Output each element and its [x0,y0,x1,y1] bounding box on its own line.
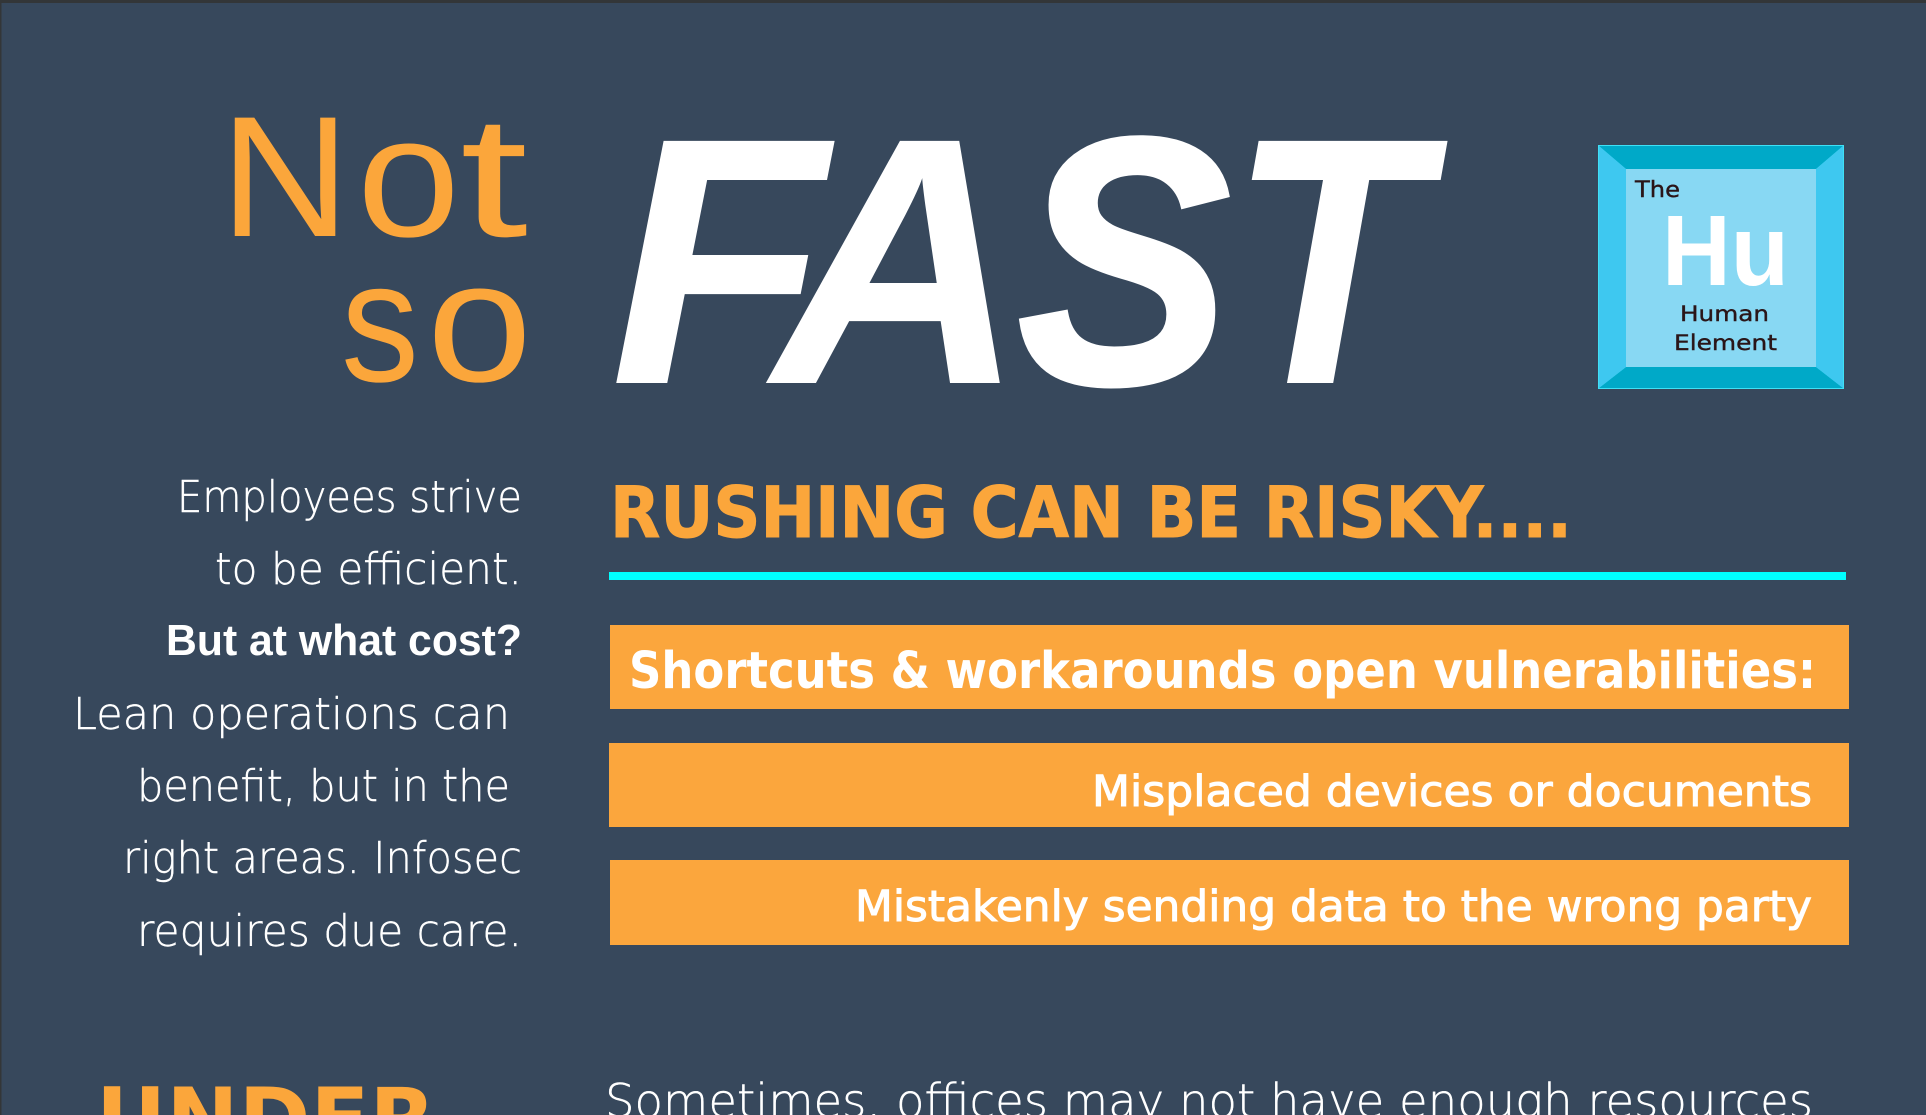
text block: intro paragraph: But at what cost? [166,616,522,665]
icon: Hu Human Element periodic tile [1598,145,1844,389]
callout: misplaced devices bar: Misplaced devices or documents [1092,767,1812,817]
text block: intro paragraph: requires due care. [137,906,522,957]
icon: Hu Human Element periodic tile: Human [1680,302,1769,326]
title: Not so: N [220,81,350,273]
text block: intro paragraph: right areas. Infosec [123,833,522,884]
title: FAST: T [1229,64,1450,458]
title: Not so [220,81,532,418]
title: Not so: s [341,226,419,418]
icon: Hu Human Element periodic tile: The [1634,178,1680,203]
callout: misplaced devices bar [609,743,1849,827]
icon: Hu Human Element periodic tile: Hu [1662,195,1789,307]
title: FAST [610,64,1450,458]
text block: intro paragraph: to be efficient. [215,544,522,595]
heading: Rushing can be risky: RUSHING CAN BE RISKY.... [610,472,1572,554]
title: Not so: o [357,81,460,273]
title: FAST: A [762,64,1025,458]
title: Not so: t [460,81,528,273]
text block: intro paragraph: benefit, but in the [137,761,510,812]
text block: intro paragraph: Lean operations can [73,689,510,740]
title: FAST: S [1017,64,1233,458]
callout: mistakenly sending data bar [610,860,1849,945]
title: FAST: F [610,64,838,458]
text block: intro paragraph [73,472,522,957]
title: Not so: o [427,226,532,418]
text block: intro paragraph: Employees strive [177,472,522,523]
callout: mistakenly sending data bar: Mistakenly sending data to the wrong party [855,882,1812,932]
divider line [609,572,1846,580]
callout: shortcuts bar [610,625,1849,709]
icon: Hu Human Element periodic tile: Element [1674,331,1777,355]
